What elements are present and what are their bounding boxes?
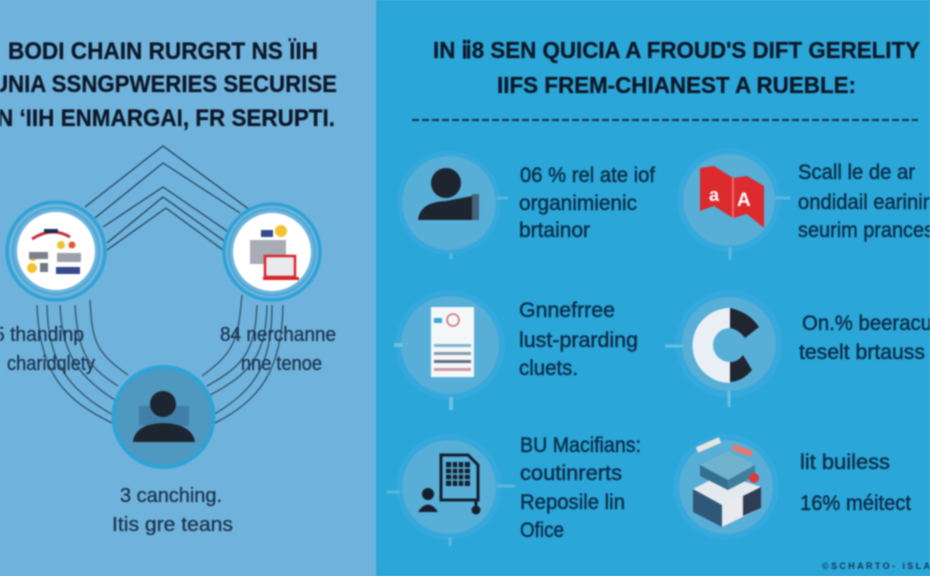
label: bottom node second line: Itis gre teans [112,514,233,536]
label: bottom node: 3 canching. [120,485,222,507]
text: business statistic [800,451,911,515]
text: document statistic: Gnnefrree [519,299,615,322]
text: compliance statistic: coutinrerts [520,462,622,485]
text: business statistic: 16% méitect [800,492,911,515]
text: breach statistic [799,312,930,364]
connector lines: upper chevrons [85,146,250,250]
text: document statistic: cluets. [519,357,578,380]
text: person statistic: 06 % rel ate iof [520,164,655,187]
text: breach statistic: teselt brtauss [799,341,925,364]
heading: left title [0,38,337,132]
node: supply network icon circle [7,202,105,300]
text: person statistic: organimienic [519,192,637,215]
heading: left title: BODI CHAIN RURGRT NS ÏIH [8,38,318,65]
text: secure earnings statistic: Scall le de ar [798,161,915,184]
text: secure earnings statistic [798,161,930,242]
text: document statistic [519,299,638,380]
text: compliance statistic [520,434,641,542]
item: document icon [394,290,505,410]
item: red map icon [677,148,790,260]
panel: right background [376,0,930,576]
item: red map icon: a [709,185,720,205]
text: compliance statistic: Ofice [520,519,564,542]
text: document statistic: lust-prarding [519,329,638,352]
credit: ©SCHARTO- iSLA [822,561,930,571]
text: person statistic [519,164,655,242]
panel: left background [0,0,376,576]
heading: left title: N ‘IIH ENMARGAI, FR SERUPTI. [0,105,335,132]
label: right node second line: nne tenoe [241,353,322,375]
text: person statistic: brtainor [519,219,590,242]
item: person statistic icon [397,151,508,259]
text: business statistic: lit builess [800,451,890,474]
heading: right title [433,37,920,98]
connector lines: lower curves [37,295,283,423]
heading: right title: IIFS FREM-CHIANEST A RUEBLE: [497,72,856,98]
item: donut gauge icon [665,290,783,407]
item: spreadsheet and person icon [387,434,515,546]
text: compliance statistic: Reposile lin [520,491,625,514]
node: team person icon circle [114,367,214,467]
text: compliance statistic: BU Macifians: [520,434,641,457]
node: software icon circle [224,204,320,300]
heading: right title: IN ⅱ8 SEN QUICIA A FROUD'S DIFT GERELITY [433,37,920,63]
label: left node second line: charidqlety [7,353,95,375]
heading: left title: UNIA SSNGPWERIES SECURISE [0,71,337,98]
item: red map icon: A [737,190,751,211]
label: right node: 84 nerchanne [220,324,336,346]
item: isometric box icon [673,434,779,540]
